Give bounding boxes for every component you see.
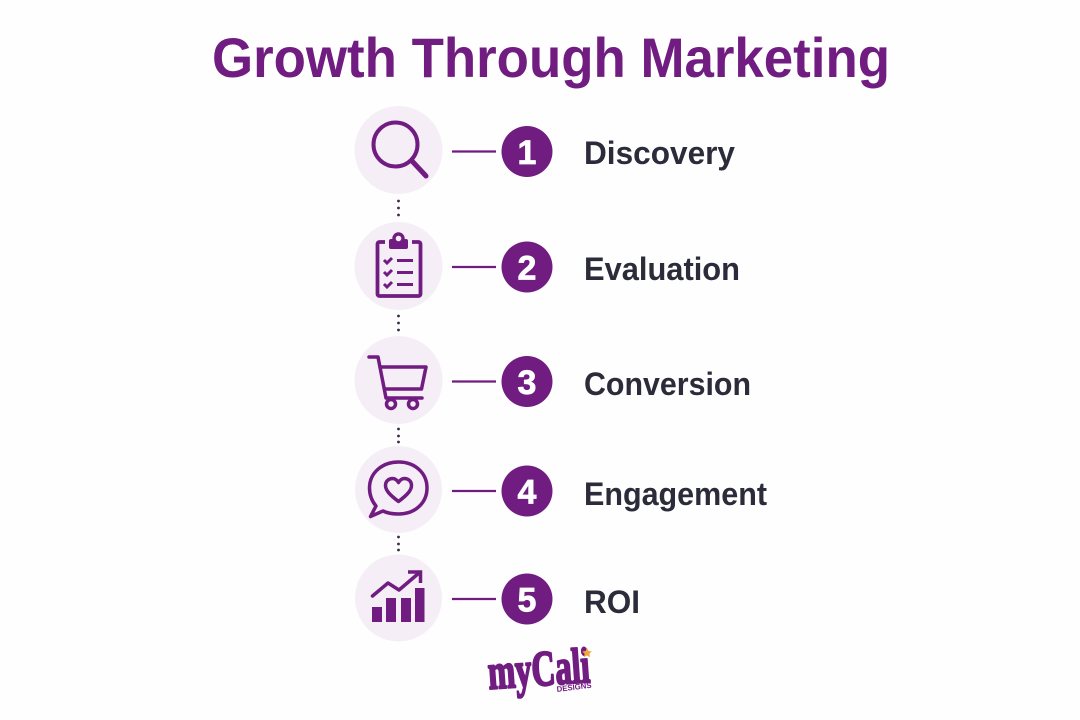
label: ROI: ROI bbox=[584, 584, 640, 620]
number badge 5 bbox=[502, 574, 552, 624]
label: Engagement: Engagement bbox=[584, 476, 767, 512]
number badge 3 bbox=[502, 356, 552, 407]
connector line 1 bbox=[452, 150, 496, 153]
number badge 5: 5 bbox=[518, 582, 536, 620]
dotted connector 1-2 bbox=[397, 200, 400, 216]
label: Discovery: Discovery bbox=[584, 135, 735, 171]
label: Evaluation: Evaluation bbox=[584, 251, 740, 287]
number badge 2 bbox=[502, 242, 552, 292]
number badge 4: 4 bbox=[518, 474, 537, 512]
icon: speech bubble with heart in circle bbox=[355, 446, 442, 533]
connector line 4 bbox=[452, 490, 496, 492]
dotted connector 4-5 bbox=[397, 536, 400, 551]
number badge 1: 1 bbox=[518, 134, 536, 172]
label: Conversion: Conversion bbox=[584, 366, 751, 402]
connector line 2 bbox=[452, 266, 496, 268]
step 4: Engagement bbox=[355, 446, 767, 533]
title: Growth Through Marketing bbox=[212, 26, 890, 89]
number badge 1 bbox=[502, 126, 552, 177]
dotted connector 3-4 bbox=[397, 428, 400, 443]
icon: clipboard checklist in circle bbox=[354, 222, 442, 310]
icon: rising bar chart in circle bbox=[355, 554, 442, 642]
number badge 2: 2 bbox=[518, 250, 536, 288]
logo: myCali Designs bbox=[486, 637, 593, 700]
step 5: ROI bbox=[355, 554, 640, 642]
step 1: Discovery bbox=[354, 106, 735, 194]
logo: myCali Designs: myCali bbox=[486, 637, 592, 700]
icon: magnifying glass in circle bbox=[354, 106, 442, 194]
connector line 3 bbox=[452, 380, 496, 383]
dotted connector 2-3 bbox=[397, 315, 400, 331]
connector line 5 bbox=[452, 598, 496, 600]
number badge 4 bbox=[502, 466, 552, 516]
logo: myCali Designs: DESIGNS bbox=[556, 681, 593, 694]
icon: shopping cart in circle bbox=[354, 336, 442, 424]
step 2: Evaluation bbox=[354, 222, 740, 310]
step 3: Conversion bbox=[354, 336, 751, 424]
number badge 3: 3 bbox=[518, 364, 536, 402]
